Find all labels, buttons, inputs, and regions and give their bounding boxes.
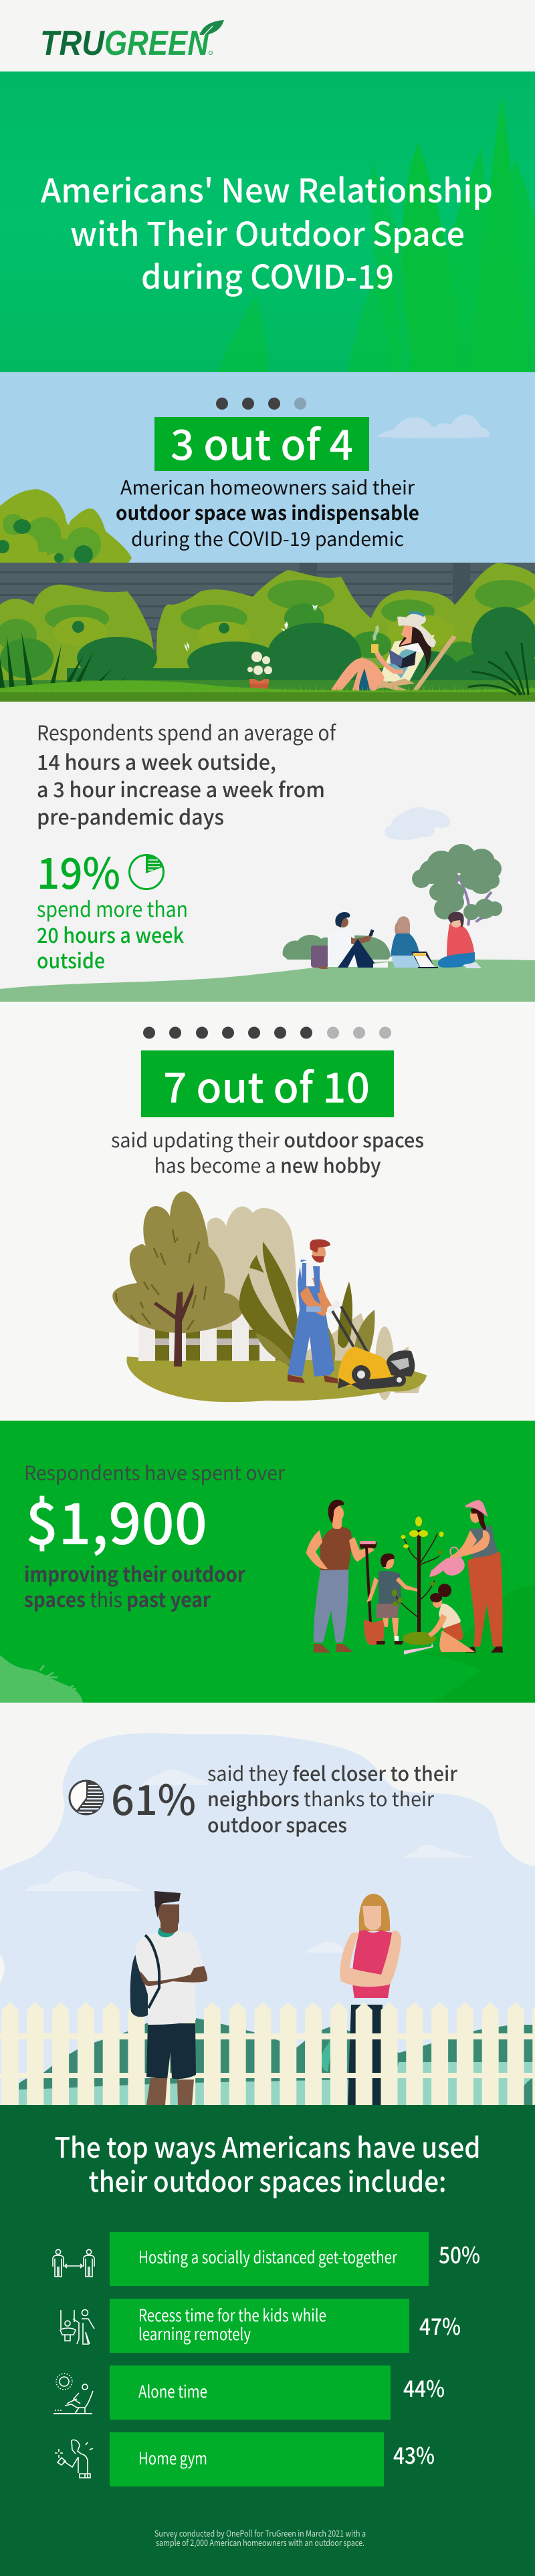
icon: home gym — [55, 2440, 93, 2478]
illustration: man mowing lawn — [112, 1191, 427, 1402]
neighbors text: said they feel closer to their — [207, 1759, 458, 1787]
improving text: spaces this past year — [24, 1584, 211, 1613]
icon: swing recess — [60, 2309, 94, 2344]
$1,900: $1,900 — [25, 1477, 207, 1561]
hours text: 14 hours a week outside, — [37, 746, 276, 776]
panel: 3 out of 4 garden scene — [0, 372, 535, 703]
icon: 61% pie — [70, 1781, 104, 1814]
mower — [332, 1306, 415, 1390]
bottom-right bush — [421, 1585, 535, 1703]
stat text — [116, 472, 419, 552]
shovel — [364, 1547, 384, 1645]
bar: recess: 47% — [419, 2309, 461, 2341]
title — [41, 165, 493, 299]
bar: recess — [110, 2299, 461, 2353]
spiky plant left — [0, 631, 126, 695]
survey footnote: sample of 2,000 American homeowners with an outdoor space. — [156, 2536, 364, 2549]
bottom-left bush — [0, 1655, 83, 1703]
clouds — [25, 1770, 477, 1953]
woman neighbor — [340, 1894, 401, 2105]
bar: home gym — [110, 2432, 435, 2486]
logo — [40, 20, 224, 63]
stat text: outdoor space was indispensable — [116, 498, 419, 526]
people on picnic — [311, 912, 481, 969]
man with overalls — [288, 1240, 341, 1384]
bar: get-together: Hosting a socially distanced get-together — [138, 2245, 397, 2269]
tree trunk — [154, 1283, 194, 1367]
tree foliage — [112, 1191, 242, 1333]
sapling — [392, 1517, 444, 1655]
stat text: American homeowners said their — [120, 472, 415, 500]
girl — [428, 1584, 475, 1652]
stat text — [111, 1125, 424, 1179]
stat text: during the COVID-19 pandemic — [131, 524, 404, 552]
19% description: outside — [37, 944, 105, 974]
hours text — [37, 716, 337, 831]
title: Americans' New Relationship — [41, 165, 493, 212]
bush above fence — [0, 489, 132, 567]
19% description: 20 hours a week — [37, 919, 184, 949]
panel: 61% neighbors — [0, 1703, 535, 2105]
title: during COVID-19 — [141, 251, 394, 299]
bush behind people — [283, 935, 391, 960]
19% description — [37, 893, 188, 974]
panel: 7 out of 10 hobby — [0, 1002, 535, 1421]
neighbors text: outdoor spaces — [207, 1810, 347, 1838]
bar: get-together — [110, 2232, 480, 2286]
bar: get-together: 50% — [439, 2237, 480, 2270]
big leaves — [239, 1242, 375, 1377]
bar: alone time: Alone time — [138, 2379, 207, 2403]
hours text: a 3 hour increase a week from — [37, 773, 325, 803]
sky blob — [0, 1733, 535, 2105]
neighbors text: neighbors thanks to their — [207, 1784, 435, 1812]
stat box: 3 out of 4 — [171, 412, 353, 472]
title: with Their Outdoor Space — [70, 208, 465, 256]
hours text: Respondents spend an average of — [37, 716, 337, 746]
progress dots — [143, 1026, 391, 1038]
bar: home gym: Home gym — [138, 2446, 207, 2470]
section heading: their outdoor spaces include: — [88, 2160, 447, 2200]
bar: alone time — [110, 2366, 445, 2420]
panel: $1,900 spent — [0, 1421, 535, 1703]
19% stat: 19% — [37, 840, 120, 901]
grass strip — [0, 680, 535, 702]
cloud — [378, 415, 490, 438]
father — [306, 1500, 377, 1653]
icon: 19% pie — [130, 855, 163, 889]
hours text: pre-pandemic days — [37, 801, 224, 831]
family planting tree — [306, 1500, 503, 1655]
spend text: Respondents have spent over — [24, 1458, 286, 1486]
hills — [19, 2017, 535, 2105]
logo: GREEN — [104, 24, 209, 63]
cloud — [385, 807, 450, 840]
panel: hours outside — [0, 702, 535, 1002]
stat text: said updating their outdoor spaces — [111, 1125, 424, 1153]
bar: home gym: 43% — [393, 2438, 435, 2470]
stat text: has become a new hobby — [154, 1151, 381, 1179]
improving text — [24, 1558, 246, 1613]
left white notch — [0, 1955, 5, 1983]
logo: TRU — [40, 24, 105, 63]
bar: recess: Recess time for the kids while — [138, 2303, 326, 2327]
61% stat: 61% — [111, 1767, 196, 1827]
hero panel — [0, 71, 535, 372]
grass blades — [217, 96, 535, 372]
progress dots — [216, 398, 306, 410]
tree — [412, 844, 502, 925]
picket fence — [0, 2002, 535, 2105]
spiky plant right — [468, 643, 528, 695]
woman relaxing in deck chair — [328, 613, 457, 695]
hill — [0, 960, 535, 1002]
improving text: improving their outdoor — [24, 1558, 246, 1588]
fence — [138, 1308, 278, 1361]
stat box: 7 out of 10 — [163, 1054, 370, 1115]
boy — [366, 1554, 418, 1644]
fence — [0, 563, 535, 690]
survey footnote: Survey conducted by OnePoll for TruGreen in March 2021 with a — [154, 2527, 366, 2539]
icon: alone time — [54, 2374, 93, 2414]
header band — [0, 0, 535, 71]
beige shrubs — [207, 1206, 423, 1400]
potted flowers — [247, 652, 272, 703]
section heading: The top ways Americans have used — [55, 2126, 480, 2166]
butterflies — [184, 605, 318, 652]
bar: recess: learning remotely — [138, 2321, 251, 2345]
mother — [429, 1500, 503, 1653]
bar: alone time: 44% — [403, 2371, 445, 2404]
hedge — [0, 563, 535, 695]
19% description: spend more than — [37, 893, 188, 923]
ground — [126, 1356, 427, 1402]
panel: top ways — [0, 2105, 535, 2576]
survey footnote — [154, 2527, 366, 2549]
neighbors text — [207, 1759, 458, 1838]
section heading — [55, 2126, 480, 2200]
man neighbor — [130, 1891, 207, 2105]
icon: social distance — [53, 2249, 94, 2277]
